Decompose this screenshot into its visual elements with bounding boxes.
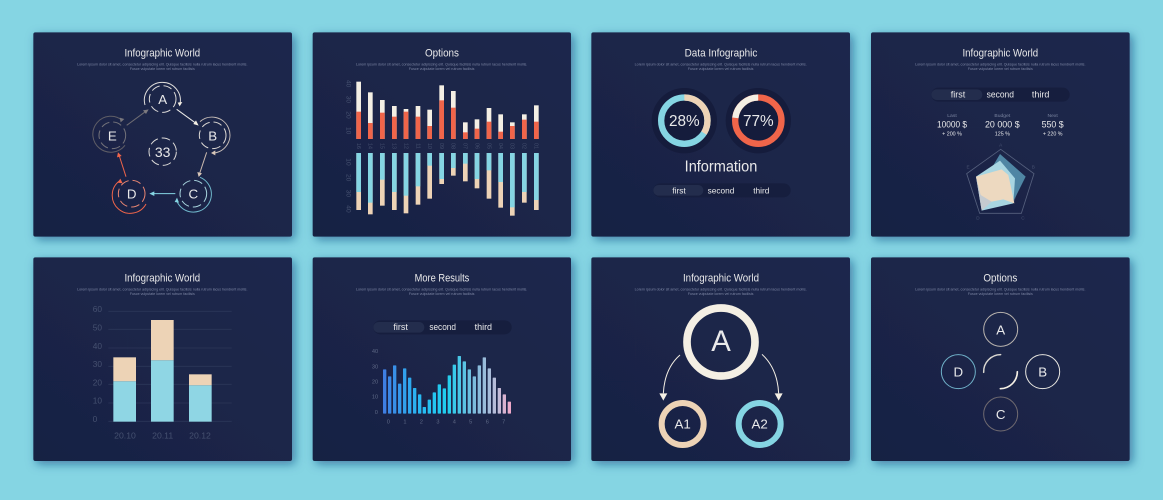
- tab selector: first: [393, 322, 408, 332]
- description text: [77, 62, 247, 71]
- description text: [915, 287, 1085, 296]
- panel: stacked column chart: [33, 257, 292, 461]
- upper axis labels: 10: [344, 127, 351, 135]
- circle A2: [739, 403, 781, 445]
- radar chart: A: [999, 142, 1003, 147]
- radar chart: E: [966, 165, 970, 170]
- tab selector: [373, 320, 512, 334]
- description text: Lorem ipsum dolor sit amet, consectetur adipiscing elit. Quisque facilisis nulla rutrum lacus hendrerit mollis.: [356, 287, 527, 291]
- bar chart: [383, 356, 511, 414]
- y axis labels: 40: [93, 341, 102, 351]
- node C: [175, 177, 211, 212]
- option C: C: [996, 407, 1006, 422]
- center arcs: [984, 355, 1017, 389]
- arrow A to B: [177, 109, 199, 126]
- description text: Lorem ipsum dolor sit amet, consectetur adipiscing elit. Quisque facilisis nulla rutrum lacus hendrerit mollis.: [635, 287, 807, 291]
- node E: [93, 116, 126, 152]
- description text: [915, 62, 1085, 71]
- tab selector: second: [708, 185, 735, 195]
- arrow to A2: [762, 354, 783, 401]
- y axis labels: 10: [93, 396, 102, 406]
- description text: Lorem ipsum dolor sit amet, consectetur adipiscing elit. Quisque facilisis nulla rutrum lacus hendrerit mollis.: [915, 62, 1085, 66]
- description text: Fusce vulputate lorem vel rutrum facilisis: [130, 292, 195, 296]
- lower axis labels: 30: [344, 190, 351, 197]
- stat: last: 10000 $: [937, 120, 967, 130]
- arrow E to A: [127, 109, 149, 125]
- option D: D: [954, 365, 963, 380]
- stat: next: + 220 %: [1043, 132, 1063, 138]
- node D: D: [127, 187, 136, 202]
- category labels: 14: [367, 143, 373, 149]
- node E: E: [108, 128, 117, 143]
- upper axis labels: 30: [344, 96, 351, 103]
- description text: Lorem ipsum dolor sit amet, consectetur adipiscing elit. Quisque facilisis nulla rutrum lacus hendrerit mollis.: [77, 287, 247, 291]
- heading: More Results: [415, 272, 469, 284]
- category labels: 11: [414, 143, 420, 149]
- lower bar chart: [356, 153, 539, 216]
- donut 77%: 77%: [743, 113, 774, 130]
- heading: Infographic World: [683, 272, 759, 284]
- circle A1: A1: [675, 417, 691, 432]
- panel: four option circles: [871, 257, 1130, 461]
- donut 28%: 28%: [669, 113, 700, 130]
- x axis labels: 20.10: [114, 430, 136, 440]
- circle A1: [662, 403, 704, 445]
- category labels: 05: [485, 143, 491, 149]
- tab selector: [931, 88, 1070, 102]
- description text: Fusce vulputate lorem vel rutrum facilisis: [688, 292, 754, 296]
- subheading: Information: [685, 158, 757, 175]
- category labels: 12: [402, 143, 408, 149]
- x axis labels: [387, 420, 505, 426]
- category labels: 06: [473, 143, 479, 149]
- panel: radar chart: [871, 32, 1130, 237]
- arrow to A1: [659, 355, 680, 401]
- y axis labels: 10: [372, 395, 378, 401]
- option C: [984, 397, 1018, 431]
- circle A: A: [711, 325, 731, 358]
- heading: Infographic World: [962, 47, 1038, 59]
- y axis labels: 50: [93, 322, 102, 332]
- column 20.11: [151, 320, 174, 422]
- x axis labels: [114, 430, 211, 440]
- option D: [941, 355, 975, 389]
- donut 77%: [726, 88, 791, 153]
- radar chart: [966, 142, 1035, 221]
- arrow D to E: [117, 152, 126, 177]
- tab selector: [653, 183, 791, 197]
- x axis labels: 7: [502, 420, 505, 426]
- category labels: 02: [521, 143, 527, 149]
- node C: C: [189, 187, 199, 202]
- y axis labels: 0: [93, 414, 98, 424]
- donut 28%: [652, 88, 717, 153]
- center value 33: [149, 138, 176, 165]
- y axis labels: 30: [372, 364, 378, 370]
- tab selector: first: [951, 90, 966, 100]
- x axis labels: 6: [486, 420, 489, 426]
- description text: Fusce vulputate lorem vel rutrum facilisis: [409, 292, 475, 296]
- option A: A: [996, 322, 1005, 337]
- tab selector: third: [475, 322, 492, 332]
- stat: budget: [985, 113, 1020, 138]
- option B: [1026, 355, 1060, 389]
- x axis labels: 20.12: [189, 430, 211, 440]
- category labels: 04: [497, 143, 503, 149]
- heading: Infographic World: [124, 272, 200, 284]
- tab selector: third: [1032, 90, 1049, 100]
- description text: Lorem ipsum dolor sit amet, consectetur adipiscing elit. Quisque facilisis nulla rutrum lacus hendrerit mollis.: [77, 62, 247, 66]
- stat: last: Last: [947, 113, 957, 119]
- option B: B: [1038, 365, 1047, 380]
- x axis labels: 5: [469, 420, 472, 426]
- x axis labels: 3: [436, 420, 440, 426]
- x axis labels: 0: [387, 420, 390, 426]
- radar chart: B: [1032, 165, 1035, 170]
- tab selector: second: [429, 322, 456, 332]
- category labels: 16: [355, 143, 361, 149]
- description text: Lorem ipsum dolor sit amet, consectetur adipiscing elit. Quisque facilisis nulla rutrum lacus hendrerit mollis.: [635, 62, 807, 66]
- column 20.12: [189, 374, 212, 422]
- stat: budget: 125 %: [995, 132, 1010, 138]
- category labels: 15: [379, 143, 385, 149]
- tab selector: third: [753, 185, 770, 195]
- upper axis labels: 20: [344, 111, 351, 119]
- panel: stacked bars up and down: [313, 32, 571, 237]
- stat: next: 550 $: [1042, 120, 1064, 130]
- panel: hierarchy circles: [591, 257, 850, 461]
- description text: Lorem ipsum dolor sit amet, consectetur adipiscing elit. Quisque facilisis nulla rutrum lacus hendrerit mollis.: [356, 62, 527, 66]
- circle A2: A2: [752, 417, 768, 432]
- description text: Fusce vulputate lorem vel rutrum facilisis: [688, 67, 754, 71]
- description text: Lorem ipsum dolor sit amet, consectetur adipiscing elit. Quisque facilisis nulla rutrum lacus hendrerit mollis.: [915, 287, 1085, 291]
- upper axis labels: 40: [344, 80, 351, 88]
- x axis labels: 4: [453, 420, 456, 426]
- column 20.10: [113, 357, 136, 422]
- lower axis labels: 20: [344, 174, 351, 182]
- description text: [356, 62, 527, 71]
- panel: gradient bar histogram: [313, 257, 571, 461]
- description text: Fusce vulputate lorem vel rutrum facilisis: [130, 67, 195, 71]
- center value 33: 33: [155, 144, 171, 160]
- stat: last: + 200 %: [942, 132, 962, 138]
- x axis labels: 1: [403, 420, 407, 426]
- x axis labels: 20.11: [152, 430, 173, 440]
- description text: [356, 287, 527, 296]
- heading: Options: [425, 47, 459, 59]
- y axis labels: 0: [375, 410, 378, 416]
- y axis labels: 60: [93, 304, 102, 314]
- category labels: 13: [391, 143, 397, 149]
- x axis labels: 2: [420, 420, 423, 426]
- node B: [199, 117, 230, 155]
- lower axis labels: 10: [344, 158, 351, 166]
- option A: [984, 312, 1018, 346]
- circle A: [687, 308, 755, 376]
- category labels: [355, 143, 539, 149]
- y axis labels: 20: [372, 380, 378, 386]
- description text: Fusce vulputate lorem vel rutrum facilisis: [409, 67, 475, 71]
- description text: Fusce vulputate lorem vel rutrum facilisis: [968, 292, 1033, 296]
- node A: A: [158, 92, 167, 107]
- node B: B: [208, 128, 217, 143]
- arrow B to C: [197, 152, 207, 177]
- description text: Fusce vulputate lorem vel rutrum facilisis: [968, 67, 1033, 71]
- stat: budget: Budget: [994, 113, 1011, 119]
- category labels: 10: [426, 143, 432, 149]
- stat: budget: 20 000 $: [985, 120, 1020, 130]
- stat: next: [1042, 113, 1064, 138]
- description text: [635, 287, 807, 296]
- category labels: 08: [450, 143, 456, 149]
- y axis labels: 20: [93, 377, 102, 387]
- upper axis labels: [344, 80, 351, 135]
- lower axis labels: [344, 158, 351, 213]
- heading: Infographic World: [124, 47, 200, 59]
- y axis labels: [372, 349, 378, 416]
- stat: last: [937, 113, 967, 138]
- radar chart: C: [1021, 216, 1025, 221]
- arrow C to D: [149, 191, 175, 196]
- panel: donut charts: [591, 32, 850, 237]
- y axis labels: 40: [372, 349, 378, 355]
- heading: Data Infographic: [685, 47, 758, 59]
- category labels: 01: [533, 143, 539, 149]
- category labels: 09: [438, 143, 444, 149]
- heading: Options: [983, 273, 1017, 285]
- stat: next: Next: [1048, 113, 1058, 119]
- panel: cycle diagram: [33, 32, 292, 237]
- node D: [112, 179, 146, 213]
- description text: [77, 287, 247, 296]
- lower axis labels: 40: [344, 205, 351, 213]
- category labels: 03: [509, 143, 515, 149]
- radar chart: D: [976, 216, 980, 221]
- tab selector: second: [987, 90, 1014, 100]
- tab selector: first: [672, 185, 686, 195]
- node A: [144, 82, 182, 112]
- y axis labels: [93, 304, 102, 424]
- category labels: 07: [462, 143, 468, 149]
- upper bar chart: [356, 82, 539, 139]
- description text: [635, 62, 807, 71]
- y axis labels: 30: [93, 359, 102, 369]
